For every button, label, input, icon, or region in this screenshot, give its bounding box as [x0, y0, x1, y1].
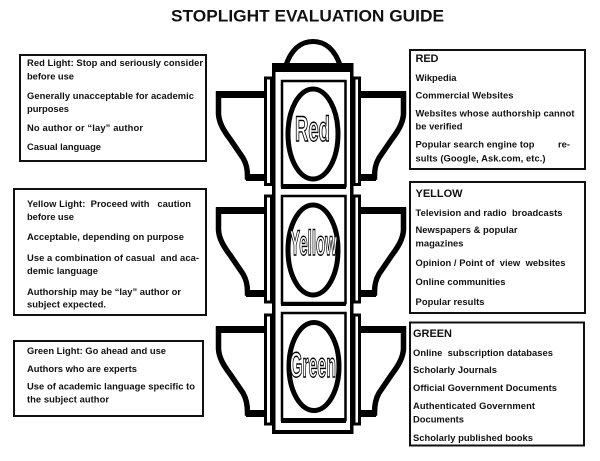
panel: red sources list: re- [558, 138, 570, 150]
green signal section [216, 313, 406, 424]
panel: red sources list: sults (Google, Ask.com, etc.) [416, 152, 546, 164]
panel: yellow light description: demic language [27, 265, 98, 276]
panel: yellow sources list: YELLOW [416, 188, 463, 200]
yellow signal section [216, 196, 406, 306]
panel: yellow sources list: Television and radio broadcasts [416, 207, 562, 218]
green signal section: Green [290, 346, 336, 385]
panel: red light description: purposes [27, 103, 69, 114]
panel: green light description: the subject author [27, 394, 109, 404]
title: STOPLIGHT EVALUATION GUIDE [171, 6, 444, 26]
panel: red light description: Generally unacceptable for academic [27, 90, 194, 101]
panel: green sources list: Official Government Documents [413, 382, 557, 393]
panel: red light description: Casual language [27, 141, 101, 152]
panel: yellow sources list: Opinion / Point of view websites [416, 257, 566, 268]
panel: green sources list: Scholarly published books [413, 432, 533, 443]
panel: green sources list: Documents [413, 414, 464, 424]
panel: red sources list: Commercial Websites [416, 90, 514, 100]
panel: red sources list: Popular search engine top [416, 138, 535, 150]
yellow signal section: Yellow [290, 224, 337, 263]
panel: green sources list: Authenticated Government [413, 400, 535, 411]
panel: red sources list: Wikpedia [416, 72, 457, 83]
panel: green light description: Use of academic language specific to [27, 380, 195, 392]
panel: green sources list: Online subscription databases [413, 347, 553, 358]
panel: red light description: No author or “lay” author [27, 122, 143, 133]
panel: red light description: Red Light: Stop and seriously consider [27, 57, 203, 68]
panel: yellow sources list: Newspapers & popular [416, 224, 518, 235]
panel: red sources list: Websites whose authorship cannot [416, 108, 574, 118]
panel: yellow light description: before use [27, 211, 74, 222]
panel: yellow sources list: Online communities [416, 276, 506, 287]
panel: yellow light description: subject expected. [27, 298, 106, 310]
panel: red sources list: RED [416, 53, 439, 65]
panel: yellow sources list: magazines [416, 238, 464, 248]
panel: yellow light description: Acceptable, depending on purpose [27, 231, 184, 242]
traffic light [216, 42, 406, 434]
panel: red light description [20, 55, 206, 161]
panel: green sources list: GREEN [413, 328, 452, 340]
panel: red sources list [410, 50, 585, 169]
panel: yellow sources list: Popular results [416, 296, 484, 307]
panel: green sources list: Scholarly Journals [413, 364, 497, 375]
panel: yellow light description: Yellow Light: Proceed with caution [27, 198, 191, 209]
panel: yellow light description: Authorship may be “lay” author or [27, 286, 181, 297]
red signal section [216, 78, 406, 189]
panel: yellow sources list [410, 182, 585, 313]
panel: green light description [14, 341, 203, 416]
panel: green light description: Authors who are experts [27, 363, 137, 374]
icon: traffic light dome [286, 42, 340, 65]
panel: green sources list [410, 322, 584, 446]
panel: yellow light description [14, 189, 206, 315]
traffic light housing [272, 63, 354, 434]
panel: yellow light description: Use a combination of casual and aca- [27, 252, 199, 263]
panel: green light description: Green Light: Go ahead and use [27, 345, 166, 356]
panel: red sources list: be verified [416, 120, 463, 132]
red signal section: Red [295, 110, 330, 149]
panel: red light description: before use [27, 70, 74, 82]
